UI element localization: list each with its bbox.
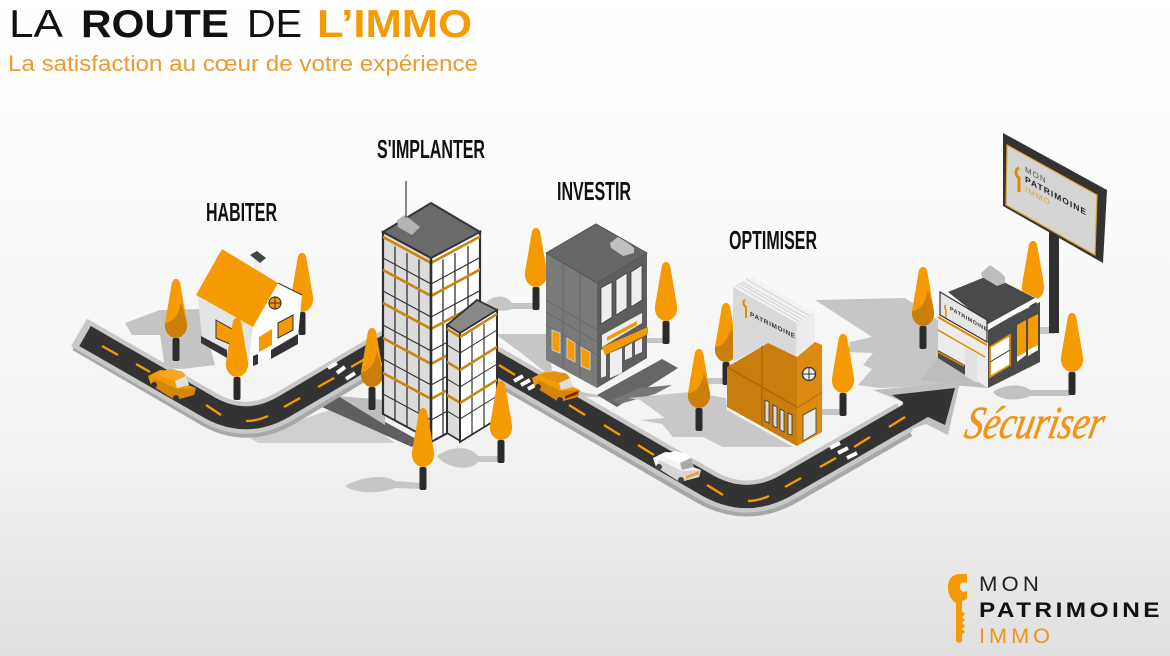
roof (546, 224, 647, 283)
gable wall (248, 283, 302, 368)
step label: s'implanter: S'IMPLANTER (377, 134, 485, 164)
tower (383, 181, 480, 442)
door (803, 408, 816, 441)
tree left of house (165, 279, 187, 361)
title: L’IMMO (317, 3, 472, 46)
board logo: PATRIMOINE (1025, 174, 1087, 218)
tree by crosswalk (361, 328, 383, 410)
pole (1049, 225, 1059, 333)
car orange on first road (148, 369, 196, 401)
tree in front of house (226, 318, 248, 400)
stack logo: PATRIMOINE (750, 311, 796, 341)
tree left of investir (525, 228, 547, 310)
tree right of investir (655, 262, 677, 344)
arrow head (892, 388, 955, 430)
round window (269, 297, 281, 309)
door (259, 329, 272, 352)
road shadow (80, 328, 905, 502)
annex tower (447, 300, 497, 442)
rooftop unit (981, 265, 1005, 286)
left wall (198, 297, 253, 368)
slot windows (765, 400, 792, 435)
orange windows (552, 330, 590, 370)
awning (602, 327, 648, 355)
step label: habiter: HABITER (206, 197, 277, 227)
tree left of optimiser (688, 349, 710, 431)
rooftop unit (610, 237, 634, 256)
subtitle: La satisfaction au cœur de votre expérience (8, 51, 478, 76)
window (278, 315, 293, 338)
ground shadows (125, 296, 1070, 492)
tree behind shop (1022, 241, 1044, 323)
door (965, 347, 977, 383)
logo (948, 572, 1163, 648)
shop front (602, 313, 642, 347)
car orange on second road (532, 371, 580, 403)
tree behind optimiser (715, 303, 737, 385)
tree behind house (291, 253, 313, 335)
board logo (1025, 164, 1087, 228)
tree right of shop (1061, 313, 1083, 395)
step label: optimiser: OPTIMISER (729, 225, 817, 255)
road (79, 323, 960, 502)
board panel (1006, 145, 1097, 255)
antenna (405, 181, 407, 218)
rooftop unit (397, 215, 420, 235)
right face (597, 253, 647, 388)
stack key icon (743, 300, 746, 318)
right face (988, 302, 1040, 388)
roof (383, 203, 480, 258)
trees in front of tower (412, 381, 512, 490)
board logo: IMMO (1025, 184, 1051, 208)
round window (802, 368, 816, 380)
step label: investir: INVESTIR (557, 176, 631, 206)
wordmark: MON (979, 572, 1043, 596)
title: LA (9, 3, 63, 46)
house (196, 249, 302, 368)
title: ROUTE (81, 3, 229, 46)
title: DE (247, 3, 302, 46)
investir building (546, 224, 648, 388)
key icon (948, 574, 967, 643)
tree left of shop (912, 267, 934, 349)
chimney (250, 251, 266, 272)
optimiser building (727, 276, 822, 446)
arrow head border (873, 382, 960, 440)
roof (948, 275, 1040, 330)
left face (938, 317, 988, 388)
upper windows (601, 265, 642, 324)
car white (653, 451, 701, 483)
left face (546, 253, 597, 388)
road border (79, 323, 905, 497)
road surface (85, 323, 915, 497)
board key icon (1016, 168, 1019, 192)
billboard (1003, 133, 1107, 333)
step label: securiser: Sécuriser (961, 398, 1110, 449)
logo: PATRIMOINE (979, 599, 1163, 622)
shop sign: PATRIMOINE (950, 306, 988, 334)
board logo: MON (1025, 164, 1047, 186)
logo: IMMO (979, 624, 1054, 648)
title (9, 3, 472, 46)
roof (196, 249, 278, 327)
right face (431, 232, 480, 442)
tree right of optimiser (832, 334, 854, 416)
right face (797, 342, 822, 446)
lane markings (102, 346, 905, 501)
shop securiser (938, 265, 1040, 388)
left face (383, 232, 431, 440)
crosswalks (328, 363, 857, 458)
white stack (733, 276, 815, 362)
orange panels (1017, 320, 1026, 362)
board frame (1003, 133, 1107, 263)
left face (727, 343, 797, 446)
